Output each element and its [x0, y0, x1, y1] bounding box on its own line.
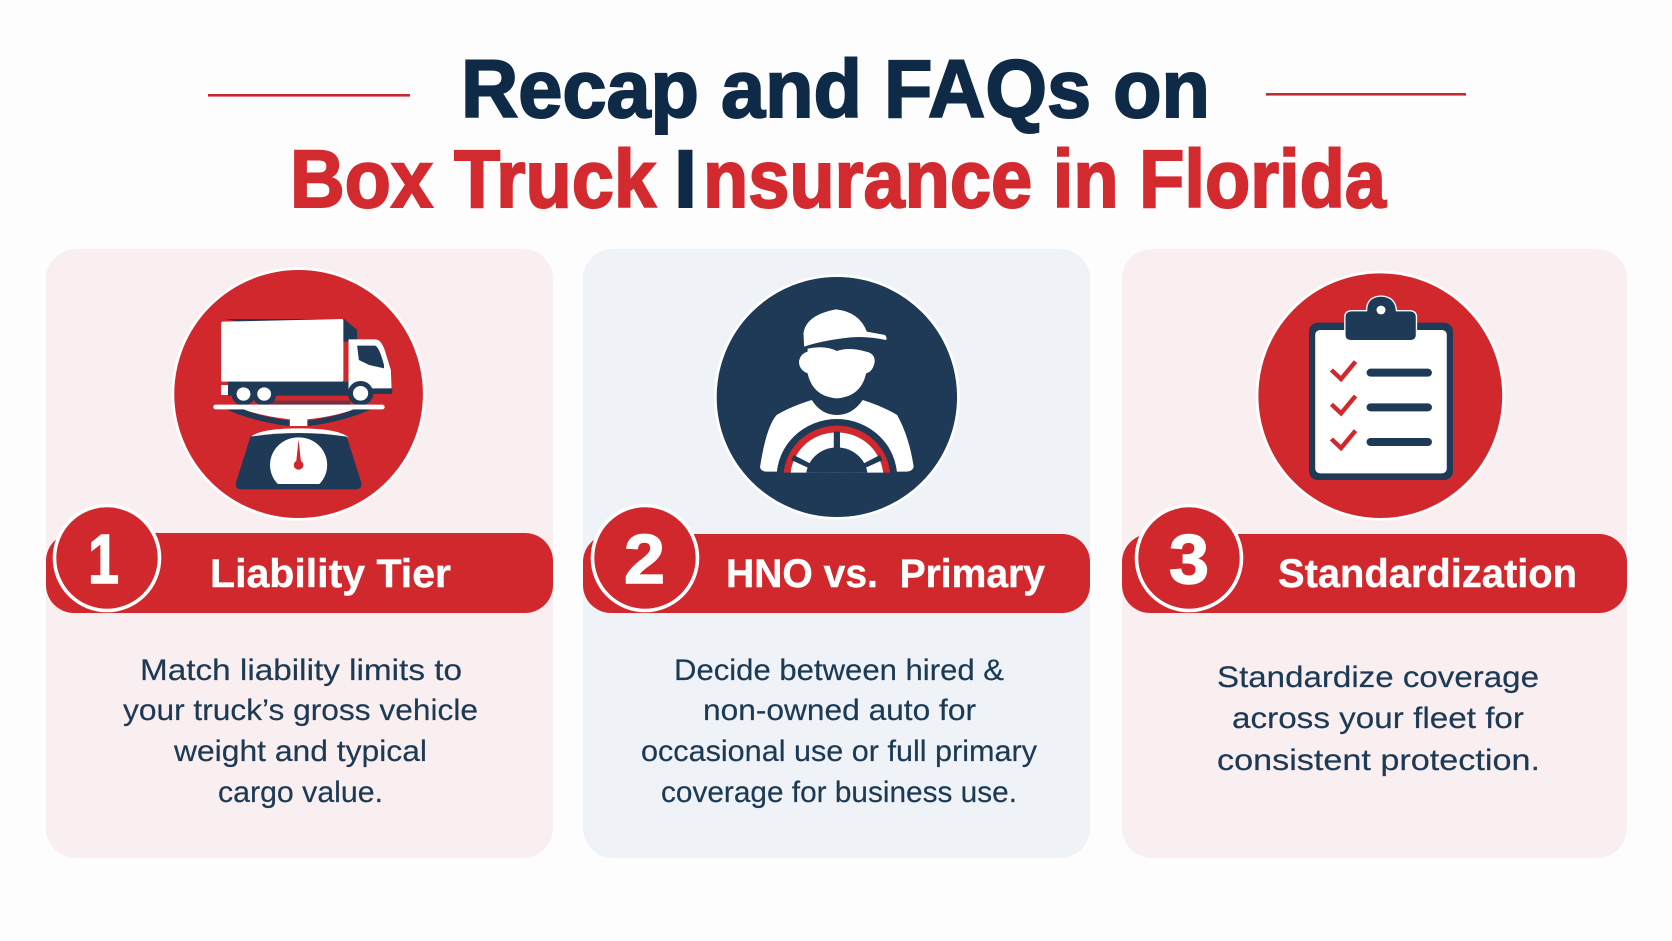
title line 2: Box Truck Insurance in Florida [290, 134, 1387, 225]
description text: occasional use or full primary [641, 735, 1037, 768]
title banner [46, 533, 553, 613]
card background [46, 249, 553, 858]
description text: weight and typical [173, 735, 427, 768]
card background [1122, 249, 1627, 858]
number badge 2 [592, 506, 698, 610]
right title rule [1266, 93, 1466, 96]
description text: Match liability limits to [140, 654, 462, 687]
heading: Liability Tier [210, 552, 451, 596]
title line 1: Recap and FAQs on [461, 44, 1210, 135]
title banner [583, 534, 1090, 613]
title line 2: Box Truck Insurance in Florida: Box Truck [290, 134, 656, 225]
title line 2: Box Truck Insurance in Florida: I [674, 134, 697, 225]
description text: your truck’s gross vehicle [123, 694, 478, 727]
panel: Liability Tier [46, 249, 553, 858]
heading: HNO vs. Primary [726, 552, 1046, 596]
title banner [1122, 534, 1627, 613]
description text: coverage for business use. [661, 776, 1017, 809]
title [290, 44, 1387, 225]
title line 2: Box Truck Insurance in Florida: nsurance in Florida [703, 134, 1387, 225]
description text: across your fleet for [1232, 702, 1524, 735]
left title rule [208, 94, 410, 97]
icon: driver at steering wheel [715, 276, 958, 536]
description text [641, 654, 1037, 809]
description text: Standardize coverage [1217, 661, 1539, 694]
number 2: 2 [624, 520, 665, 598]
description text: consistent protection. [1217, 744, 1540, 777]
description text: cargo value. [218, 776, 383, 809]
icon: truck on weighing scale [173, 269, 424, 519]
number 1: 1 [88, 520, 119, 598]
description text: non-owned auto for [703, 694, 976, 727]
number 3: 3 [1169, 520, 1209, 598]
description text [1217, 661, 1540, 777]
number badge 1 [54, 506, 160, 610]
card background [583, 249, 1090, 858]
description text [123, 654, 478, 809]
heading: Standardization [1278, 552, 1577, 596]
number badge 3 [1136, 506, 1242, 610]
panel: HNO vs. Primary [583, 249, 1090, 858]
icon: checklist clipboard [1257, 272, 1504, 519]
panel: Standardization [1122, 249, 1627, 858]
description text: Decide between hired & [674, 654, 1004, 687]
